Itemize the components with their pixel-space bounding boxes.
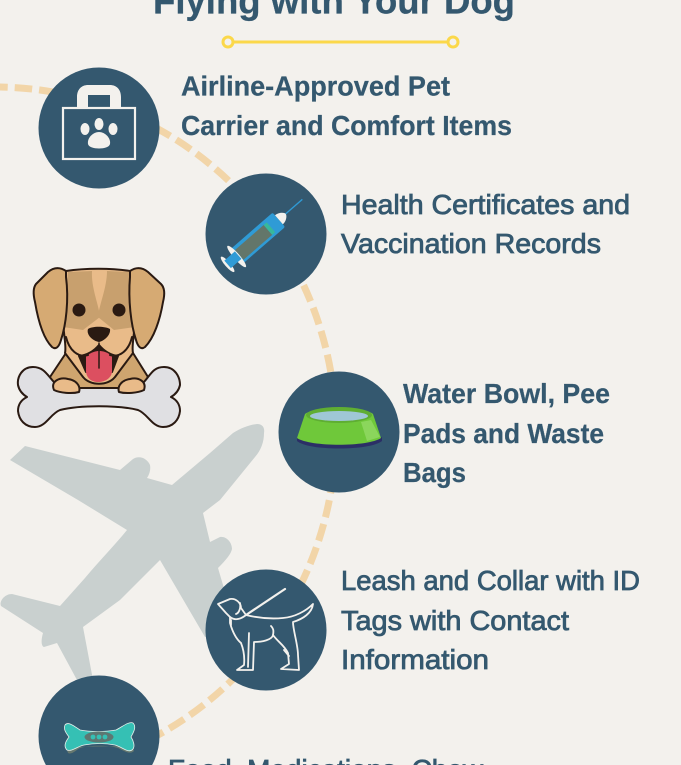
dog smile [66, 337, 132, 356]
icon: carrier with paw [63, 85, 135, 159]
circle: dog on leash [206, 570, 326, 690]
text block: water bowl: Water Bowl, Pee [403, 378, 610, 409]
dog nose [88, 327, 110, 342]
icon: leashed dog outline [218, 589, 313, 670]
icon: teal bone toy [64, 723, 135, 753]
dog paws [53, 378, 79, 393]
text block: carrier [181, 70, 512, 141]
text block: leash and collar: Tags with Contact [341, 605, 569, 636]
bone [18, 367, 180, 427]
circle: bone treat [38, 676, 160, 765]
dog ears [34, 268, 67, 348]
circle: syringe [206, 174, 326, 294]
text block: carrier: Airline-Approved Pet [181, 70, 450, 102]
text block: water bowl: Pads and Waste [403, 418, 604, 449]
text block: carrier: Carrier and Comfort Items [181, 110, 512, 141]
dog with bone illustration [18, 268, 180, 427]
dog head [63, 269, 135, 384]
circle: water bowl [278, 372, 400, 492]
dog eyes [72, 304, 86, 316]
icon: syringe [216, 189, 312, 277]
dog mouth [79, 345, 118, 372]
airplane silhouette [1, 424, 264, 680]
text block: health certificates: Vaccination Records [341, 228, 601, 259]
text block: health certificates: Health Certificates and [341, 189, 630, 220]
icon: green bowl [297, 407, 382, 448]
text block: leash and collar [341, 565, 640, 675]
dog head patches [63, 271, 135, 330]
title underline with ring ends [223, 37, 458, 47]
text block: water bowl [403, 378, 610, 488]
dog tongue [86, 351, 112, 382]
dashed route arc: upper [0, 87, 336, 432]
dashed route arc: lower [0, 432, 336, 765]
text block: leash and collar: Information [341, 644, 489, 675]
text block: water bowl: Bags [403, 457, 466, 488]
text block: leash and collar: Leash and Collar with ID [341, 565, 640, 596]
dog body [50, 353, 148, 390]
circle: pet carrier [38, 68, 160, 188]
text block: health certificates [341, 189, 630, 259]
